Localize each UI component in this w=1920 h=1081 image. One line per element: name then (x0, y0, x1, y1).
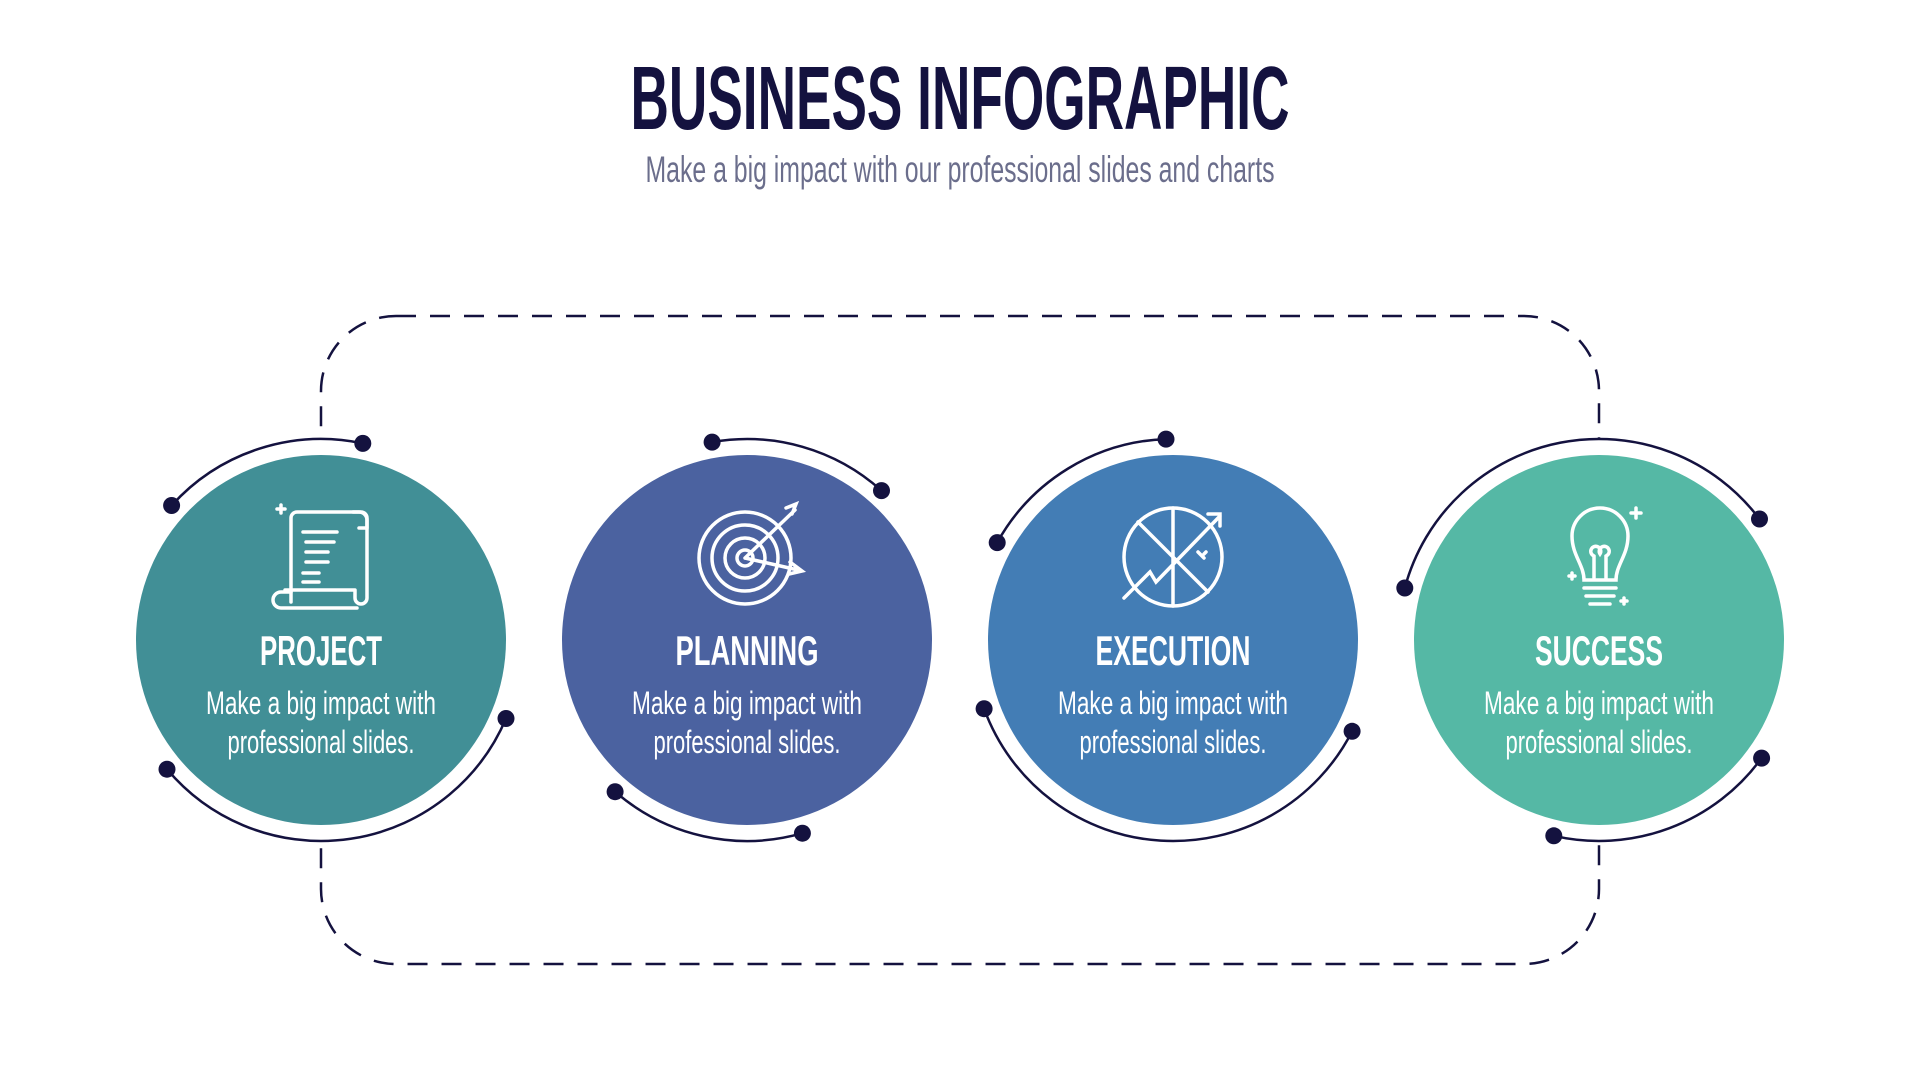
text: planning: Make a big impact with (632, 685, 862, 721)
text: project: Make a big impact with (206, 685, 436, 721)
icon: chart (1124, 508, 1222, 606)
step: project (120, 435, 522, 841)
heading: execution: EXECUTION (1096, 627, 1250, 674)
step: planning (546, 434, 948, 842)
title: BUSINESS INFOGRAPHIC (630, 49, 1290, 149)
text: execution: Make a big impact with (1058, 685, 1288, 721)
icon: scroll (273, 505, 367, 608)
step: planning: professional slides. (654, 724, 840, 760)
subtitle: Make a big impact with our professional slides and charts (646, 149, 1274, 190)
heading: project: PROJECT (260, 627, 382, 674)
step: success: professional slides. (1506, 724, 1692, 760)
heading: success: SUCCESS (1535, 627, 1663, 674)
icon: light bulb (1569, 508, 1641, 604)
icon: target (699, 504, 802, 604)
step: execution (972, 431, 1374, 841)
text: success: Make a big impact with (1484, 685, 1714, 721)
step: execution: professional slides. (1080, 724, 1266, 760)
heading: planning: PLANNING (676, 627, 818, 674)
step: project: professional slides. (228, 724, 414, 760)
step: success (1396, 439, 1800, 844)
dashed loop connector (321, 316, 1599, 964)
